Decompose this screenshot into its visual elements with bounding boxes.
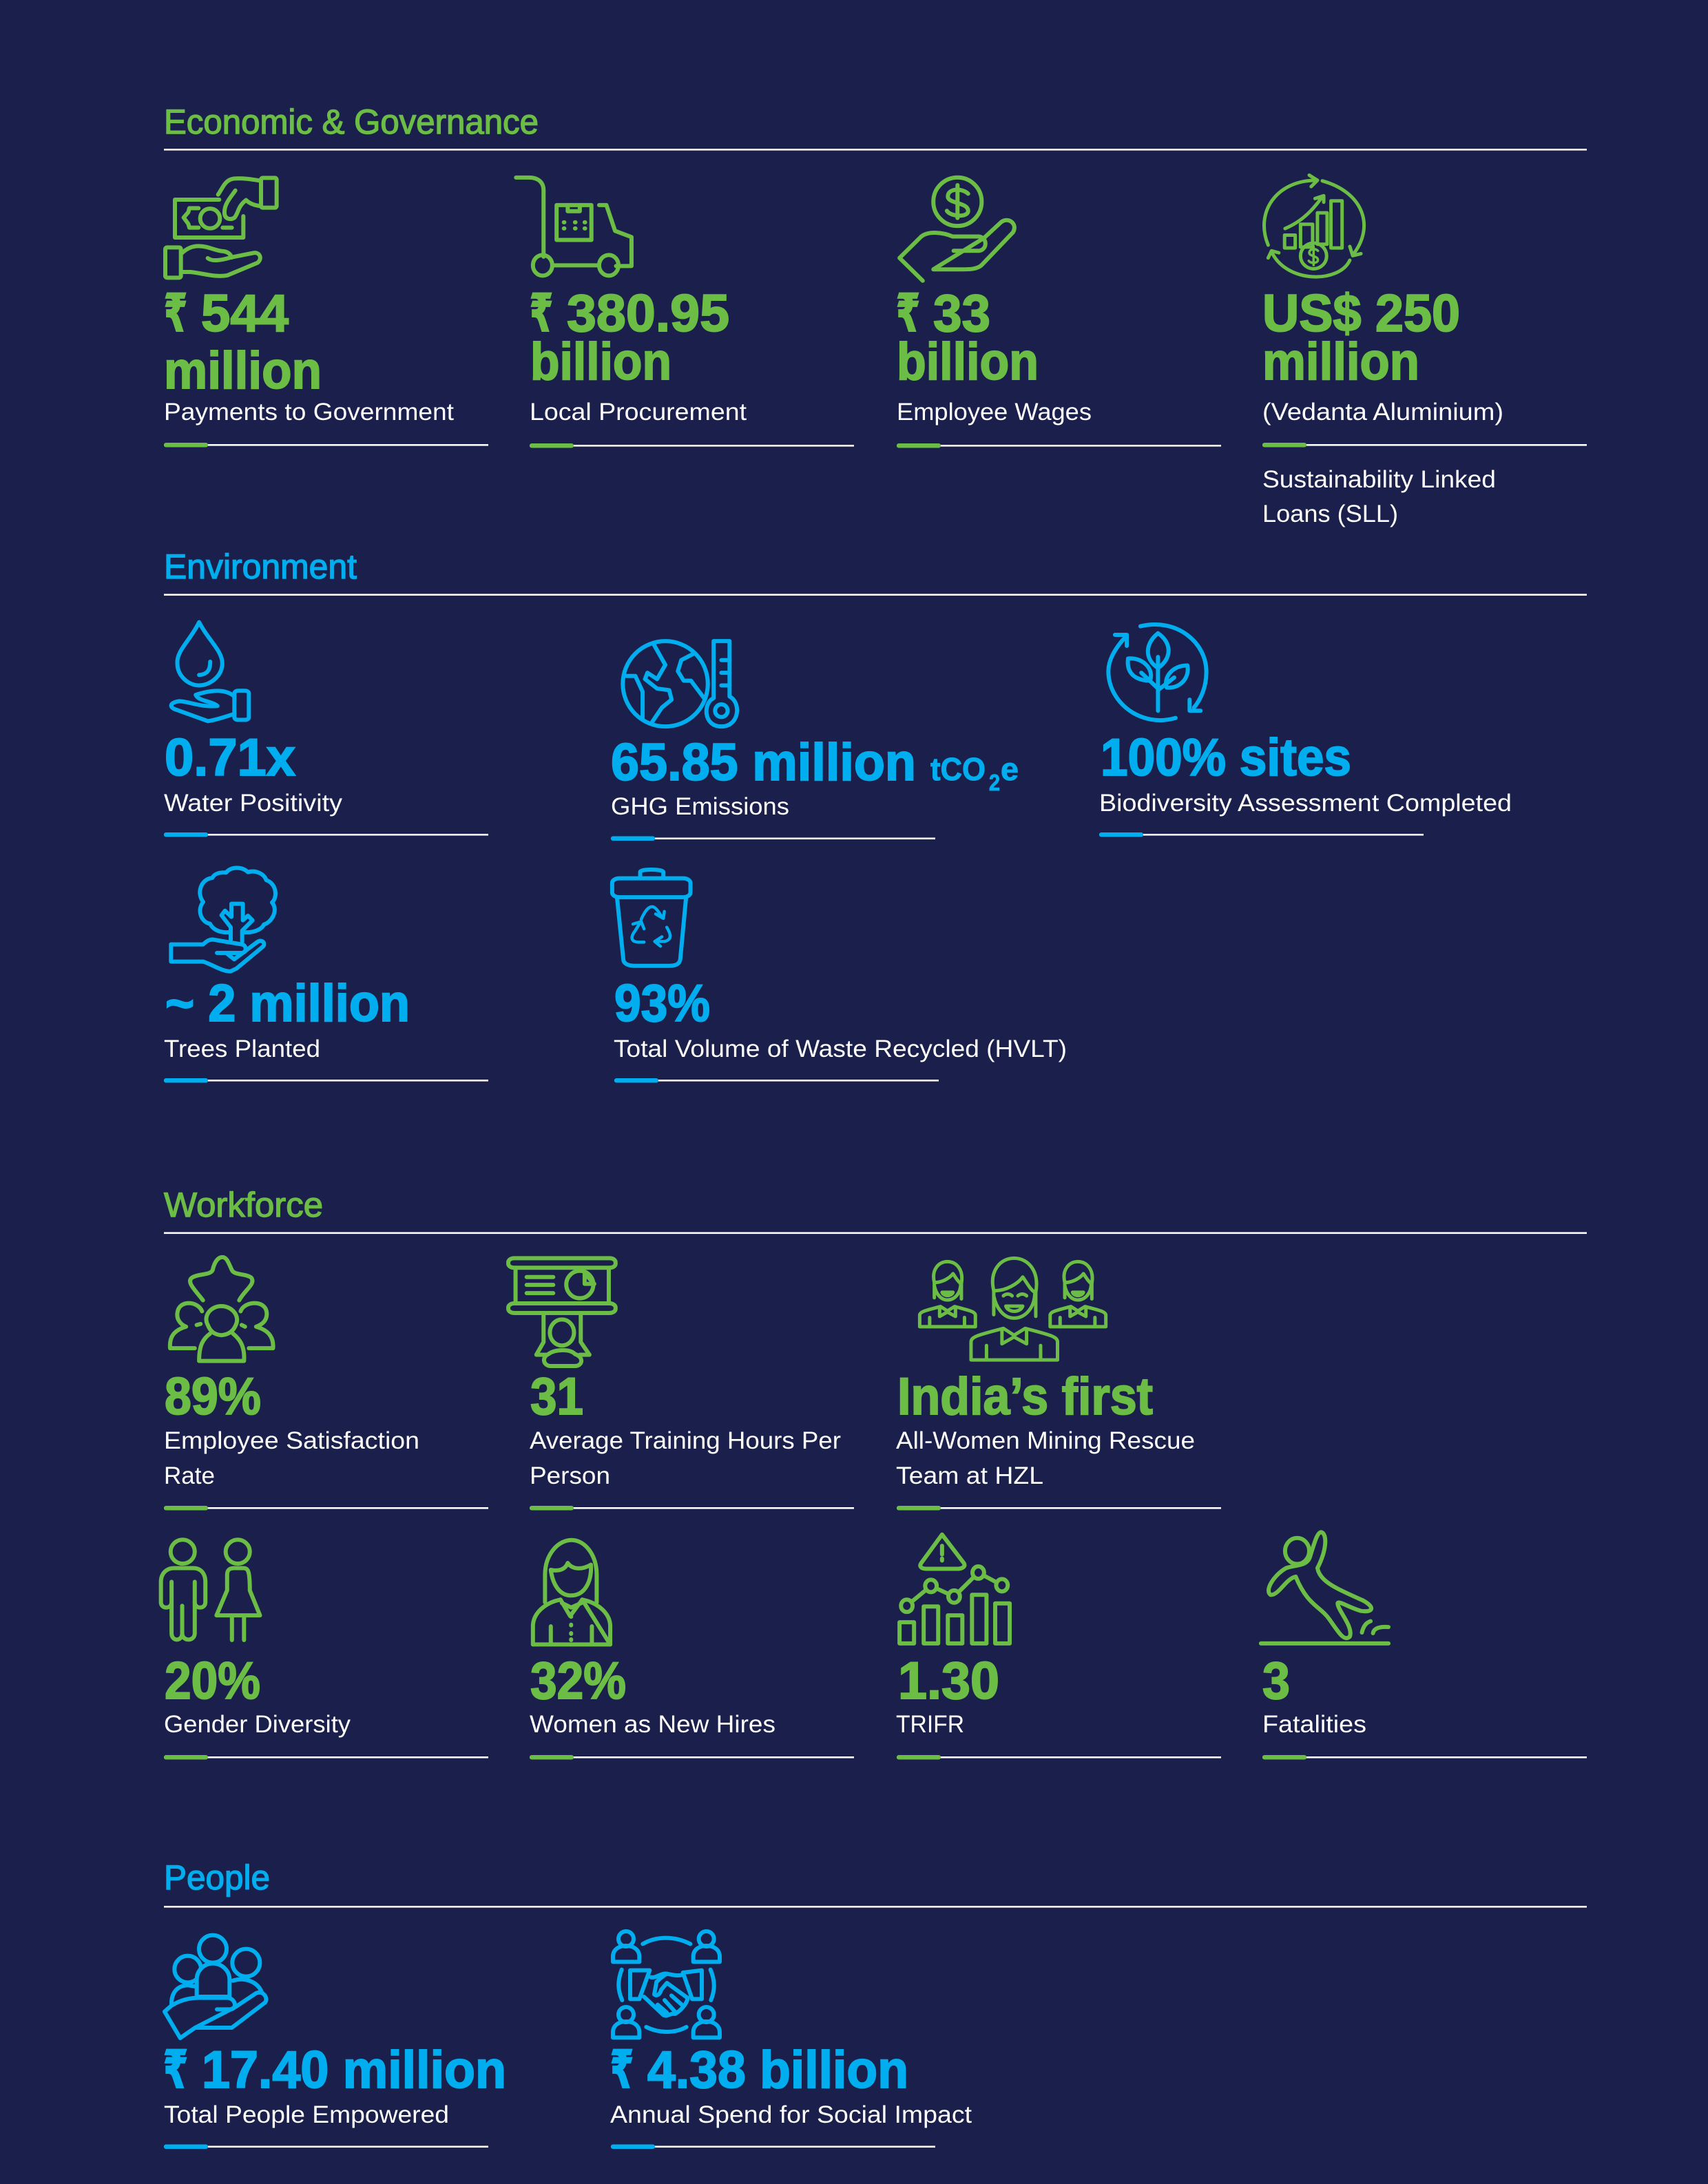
stat: Total People Empowered — [163, 1935, 506, 2149]
icon: handshake with four people — [613, 1931, 720, 2037]
label: GHG Emissions — [611, 793, 789, 820]
value: 89%: 89% — [165, 1367, 261, 1426]
icon: man and woman — [161, 1540, 260, 1640]
value: 32%: 32% — [530, 1652, 626, 1710]
icon: woman bust — [533, 1540, 610, 1644]
icon: tree on hand — [171, 868, 275, 972]
value: 65.85 million tCO2e: 2 — [989, 770, 1000, 795]
stat: Water Positivity — [164, 622, 488, 837]
label: Employee Satisfaction — [164, 1427, 419, 1454]
value: India's first: India’s first — [897, 1367, 1153, 1426]
value: 100% sites: 100% sites — [1101, 728, 1351, 787]
panel: Economic & Governance — [164, 103, 1587, 527]
stat: TRIFR — [896, 1535, 1221, 1760]
panel: Workforce — [161, 1186, 1587, 1760]
label — [896, 1427, 1195, 1489]
value: 3: 3 — [1262, 1652, 1290, 1710]
stat: Average Training Hours — [508, 1258, 854, 1511]
stat: Payments to Government — [164, 178, 488, 448]
value: ₹ 544 million — [164, 284, 322, 400]
value: ₹ 33 billion — [896, 284, 1039, 391]
label: Gender Diversity — [164, 1711, 351, 1738]
value: ₹ 4.38 billion: 4.38 billion — [647, 2041, 908, 2099]
stat: Women as New Hires — [530, 1540, 854, 1760]
value: ₹ 33 billion: billion — [897, 333, 1039, 391]
value: 1.30: 1.30 — [898, 1652, 999, 1710]
value: 93%: 93% — [614, 974, 710, 1033]
icon: hand holding dollar coin — [899, 178, 1014, 281]
label: Local Procurement — [530, 399, 747, 426]
value: 65.85 million tCO2e: e — [1001, 751, 1019, 787]
heading: Environment: Environment — [164, 547, 357, 586]
panel: Environment — [164, 547, 1587, 1082]
stat: Trees Planted — [164, 868, 488, 1082]
label: Fatalities — [1262, 1711, 1366, 1738]
heading: People: People — [164, 1858, 270, 1897]
label: Team at HZL — [896, 1462, 1043, 1489]
label: Biodiversity Assessment Completed — [1099, 790, 1512, 817]
icon: recycling bin — [612, 870, 691, 966]
note: Sustainability Linked Loans (SLL) — [1262, 466, 1496, 527]
value: ₹ 33 billion: 33 — [933, 284, 990, 343]
value: ₹ 380.95 billion: 380.95 — [567, 284, 729, 343]
icon: money passing between hands — [165, 178, 277, 277]
heading: Economic & Governance: Economic & Governance — [164, 103, 539, 141]
value: ₹ 17.40 million: ₹ — [163, 2041, 188, 2099]
stat: Annual Spend for Social Impact — [610, 1931, 972, 2149]
stat: Fatalities — [1261, 1532, 1587, 1760]
panel: People — [163, 1858, 1587, 2149]
label: Vedanta Aluminium: (Vedanta Aluminium) — [1262, 399, 1503, 426]
stat: Waste Recycled — [612, 870, 1067, 1082]
label: Women as New Hires — [530, 1711, 775, 1738]
icon: growth chart in circular arrows — [1264, 175, 1364, 277]
value: ₹ 544 million: ₹ — [164, 284, 187, 343]
note: Sustainability Linked Loans (SLL): Sustainability Linked — [1262, 466, 1496, 493]
icon: globe and thermometer — [623, 641, 737, 726]
value: ₹ 544 million: million — [164, 342, 322, 400]
value: ₹ 380.95 billion — [530, 284, 729, 391]
value: 65.85 million tCO2e: tCO — [930, 751, 986, 787]
stat: Gender Diversity — [161, 1540, 488, 1760]
label: Annual Spend for Social Impact — [610, 2101, 972, 2128]
stat: Local Procurement — [516, 178, 854, 448]
stat: Biodiversity Assessment — [1099, 624, 1512, 837]
stat: Employee Satisfaction — [164, 1257, 488, 1511]
label: Total Volume of Waste Recycled (HVLT) — [614, 1036, 1067, 1062]
label: Payments to Government — [164, 399, 454, 426]
value: ₹ 33 billion: ₹ — [896, 284, 920, 343]
value: 65.85 million tCO2e: 65.85 million — [611, 733, 916, 792]
value: ₹ 17.40 million: 17.40 million — [202, 2041, 506, 2099]
label: Total People Empowered — [164, 2101, 449, 2128]
label: Water Positivity — [164, 790, 343, 817]
label: Rate — [164, 1462, 215, 1489]
icon: three women — [919, 1258, 1106, 1360]
icon: delivery trolley truck — [516, 178, 632, 275]
value: 0.71x: 0.71x — [165, 728, 295, 787]
value: ₹ 380.95 billion: billion — [530, 333, 671, 391]
value: US$ 250 million — [1262, 284, 1460, 391]
icon: water drop over hand — [171, 622, 249, 721]
label: Trees Planted — [164, 1036, 320, 1062]
icon: slipping figure — [1261, 1532, 1388, 1644]
value: ~ 2 million: ~ 2 million — [165, 974, 410, 1033]
icon: group with star — [170, 1257, 273, 1361]
value: US$ 250 million: million — [1262, 333, 1419, 391]
stat: Employee Wages — [896, 178, 1221, 448]
icon: plant in circular arrows — [1108, 624, 1207, 720]
label: Person — [530, 1462, 610, 1489]
value: US$ 250 million: US$ 250 — [1262, 284, 1460, 343]
stat: All-Women Mining Rescue Team — [896, 1258, 1221, 1511]
label — [164, 1427, 419, 1489]
value: ₹ 4.38 billion: ₹ — [610, 2041, 634, 2099]
value: 20%: 20% — [165, 1652, 260, 1710]
note: Sustainability Linked Loans (SLL): Loans (SLL) — [1262, 501, 1398, 527]
label: TRIFR — [896, 1711, 964, 1738]
stat: GHG Emissions — [611, 641, 1019, 841]
value: 31: 31 — [530, 1367, 583, 1426]
icon: people in hand — [165, 1935, 266, 2038]
icon: warning triangle over chart — [899, 1535, 1010, 1644]
label: All-Women Mining Rescue — [896, 1427, 1195, 1454]
stat: Sustainability Linked Loans — [1262, 175, 1587, 527]
value: ₹ 380.95 billion: ₹ — [530, 284, 553, 343]
label: Average Training Hours Per — [530, 1427, 841, 1454]
label: Employee Wages — [897, 399, 1092, 426]
value: ₹ 544 million: 544 — [201, 284, 289, 343]
icon: presenter at board — [508, 1258, 616, 1366]
heading: Workforce: Workforce — [164, 1186, 323, 1224]
label — [530, 1427, 841, 1489]
